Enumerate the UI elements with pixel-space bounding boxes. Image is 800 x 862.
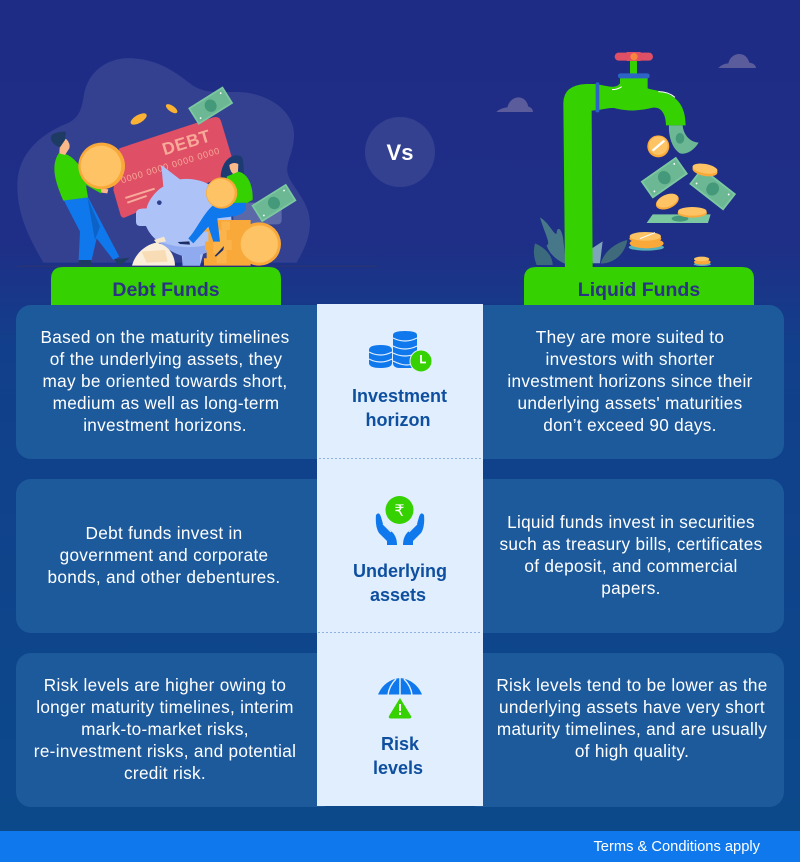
- panel: risk levels liquid: underlying assets have very short: [499, 697, 765, 717]
- panel: investment horizon liquid: don’t exceed 90 days.: [543, 415, 717, 435]
- panel: risk levels debt: [16, 653, 336, 807]
- illustration: liquid funds tap: [496, 52, 756, 270]
- footer bar: [0, 831, 800, 862]
- label: investment horizon: [352, 386, 447, 430]
- bill from spout: [669, 125, 699, 154]
- panel: underlying assets debt: bonds, and other debentures.: [48, 567, 280, 587]
- panel: risk levels liquid: Risk levels tend to be lower as the: [496, 675, 768, 695]
- credit card: 0000 0000 0000 0000: [120, 145, 221, 185]
- faucet: [563, 60, 686, 270]
- man: [51, 132, 130, 266]
- panel: underlying assets debt: [16, 479, 336, 633]
- coin pile: [629, 232, 664, 251]
- flat bill: [647, 214, 711, 223]
- label: risk levels: levels: [373, 758, 423, 778]
- card behind pig right: [233, 203, 282, 224]
- woman: [178, 155, 253, 257]
- coins: [654, 162, 718, 218]
- ground line: [17, 265, 377, 268]
- panel: investment horizon liquid: underlying assets' maturities: [517, 393, 743, 413]
- panel: risk levels debt: mark-to-market risks,: [81, 719, 249, 739]
- heading: debt funds: Debt Funds: [112, 279, 220, 301]
- flying coins: [129, 102, 179, 127]
- plants: [534, 217, 627, 265]
- panel: investment horizon debt: medium as well as long-term: [53, 393, 279, 413]
- panel: investment horizon liquid: investors with shorter: [546, 349, 714, 369]
- panel: investment horizon debt: may be oriented towards short,: [43, 371, 287, 391]
- panel: underlying assets liquid: [464, 479, 784, 633]
- bill right: [251, 184, 297, 222]
- coin held by woman: [206, 177, 237, 209]
- panel: underlying assets liquid: papers.: [601, 578, 661, 598]
- panel: underlying assets liquid: of deposit, and commercial: [524, 556, 738, 576]
- tap handle: [615, 52, 653, 61]
- label: underlying assets: [353, 561, 447, 605]
- coin: [647, 135, 669, 157]
- bill top: [188, 86, 233, 125]
- label: risk levels: [373, 734, 423, 778]
- icon: hands with rupee: [376, 496, 424, 545]
- panel: investment horizon liquid: They are more suited to: [536, 327, 724, 347]
- icon: hands with rupee: ₹: [394, 503, 405, 520]
- panel: risk levels debt: Risk levels are higher owing to: [44, 675, 286, 695]
- coin stack: [203, 220, 251, 266]
- panel: investment horizon liquid: [464, 305, 784, 459]
- vs badge: [365, 117, 435, 187]
- heading: debt funds: [51, 267, 281, 305]
- label: underlying assets: assets: [370, 585, 426, 605]
- label: investment horizon: Investment: [352, 386, 447, 406]
- panel: investment horizon debt: Based on the maturity timelines: [40, 327, 290, 347]
- panel: underlying assets liquid: Liquid funds invest in securities: [507, 512, 755, 532]
- heading: liquid funds: Liquid Funds: [578, 279, 700, 301]
- panel: underlying assets debt: Debt funds invest in: [86, 523, 242, 543]
- label: investment horizon: horizon: [366, 410, 430, 430]
- credit card: DEBT: [160, 125, 213, 159]
- panel: investment horizon debt: [16, 305, 336, 459]
- panel: risk levels liquid: of high quality.: [575, 741, 689, 761]
- panel: underlying assets liquid: such as treasury bills, certificates: [500, 534, 762, 554]
- icon: umbrella with warning: [378, 677, 422, 718]
- panel: risk levels debt: re-investment risks, and potential: [34, 741, 296, 761]
- piggy bank: [136, 165, 231, 266]
- vs badge: Vs: [387, 140, 413, 165]
- label: risk levels: Risk: [381, 734, 420, 754]
- label: underlying assets: Underlying: [353, 561, 447, 581]
- panel: risk levels debt: longer maturity timelines, interim: [36, 697, 294, 717]
- panel: risk levels liquid: [464, 653, 784, 807]
- panel: risk levels liquid: maturity timelines, and are usually: [497, 719, 767, 739]
- illustration: debt funds: [17, 58, 377, 267]
- panel: investment horizon debt: of the underlying assets, they: [50, 349, 282, 369]
- footer bar: Terms & Conditions apply: [593, 839, 761, 855]
- large coin: [238, 222, 281, 266]
- small coin pile: [694, 257, 711, 266]
- icon: coins with clock: [369, 331, 432, 372]
- background blob: [17, 58, 310, 263]
- bills: [641, 157, 688, 199]
- panel: risk levels debt: credit risk.: [124, 763, 206, 783]
- heading: liquid funds: [524, 267, 754, 305]
- clouds: [496, 54, 756, 112]
- panel: investment horizon debt: investment horizons.: [83, 415, 247, 435]
- coin held by man: [78, 143, 125, 189]
- money bag: [132, 237, 175, 266]
- centre column: [317, 304, 483, 806]
- credit card: [113, 117, 232, 218]
- panel: investment horizon liquid: investment horizons since their: [507, 371, 753, 391]
- panel: underlying assets debt: government and corporate: [60, 545, 268, 565]
